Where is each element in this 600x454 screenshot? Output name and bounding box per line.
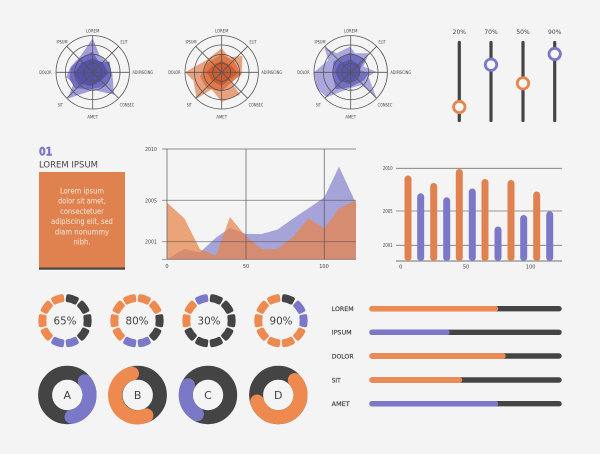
donut A [45,373,90,417]
radar labels: AMET [345,114,356,120]
radar labels [168,28,283,120]
card text: adipiscing elit, sed [51,217,113,226]
radar labels: CONSEC [120,102,134,108]
radar labels: IPSUM [56,40,68,46]
radar labels: SIT [187,102,192,108]
radar labels: CONSEC [378,102,392,108]
donut B: B [134,389,141,402]
radar chart: large purple one [297,28,412,120]
area chart axis labels: 2010 [145,147,157,153]
radar labels: ADIPISCING [261,70,283,76]
orange area [167,200,356,259]
radar labels: DOLOR [39,70,52,76]
area chart axis labels [145,147,329,270]
text panel [39,145,125,270]
radar data polygons [185,48,242,102]
card text: diam nonummy [55,227,110,236]
area chart axis labels: 0 [165,264,169,270]
radar labels: AMET [216,114,227,120]
bar chart axis labels: 2001 [383,243,393,249]
segmented donut 65%: 65% [54,316,77,328]
segmented donut 30%: 30% [198,316,221,328]
area chart axis labels: 2005 [145,198,157,204]
radar labels: LOREM [86,28,100,34]
slider 20%: 20% [453,29,466,36]
area chart axis labels: 100 [319,264,329,270]
bar: amet: AMET [332,400,350,408]
area chart axis labels: 2001 [145,240,157,246]
bar: ipsum: IPSUM [332,329,352,337]
slider 70%: 70% [484,29,498,36]
bar chart axis labels: 50 [463,264,469,270]
card text: consectetuer [60,207,105,216]
bar chart axis labels: 0 [399,264,402,270]
area chart axis labels: 50 [243,264,249,270]
radar labels: ADIPISCING [390,70,412,76]
bars [408,172,550,258]
orange card [39,172,125,270]
donut C: C [204,389,212,402]
area chart [145,147,356,270]
bar chart [383,166,562,270]
donut A: A [64,389,72,402]
segmented donut 80%: 80% [126,316,149,328]
panel heading: LOREM IPSUM [39,161,98,171]
slider 90%: 90% [548,29,562,36]
radar data polygons [66,38,114,99]
card text [51,186,113,246]
radar labels: DOLOR [297,70,310,76]
radar chart: purple one [39,28,154,120]
radar chart: orange one [168,28,283,120]
radar labels: CONSEC [249,102,263,108]
bar chart axis labels: 2005 [383,209,393,215]
donut D [256,373,301,417]
segmented donut 65% [40,296,90,346]
number heading: 01 [39,145,52,159]
purple area [167,167,356,259]
bar: sit: SIT [332,376,341,384]
card text: Lorem ipsum [60,186,104,195]
donut B [115,373,160,417]
radar labels: AMET [87,114,98,120]
progress bars [332,305,559,408]
radar labels: DOLOR [168,70,181,76]
radar labels [39,28,154,120]
card text: nibh. [74,237,90,246]
radar labels: ELIT [379,40,386,46]
radar labels: ADIPISCING [132,70,154,76]
bar chart axis labels: 2010 [383,166,393,172]
radar labels: IPSUM [315,40,326,46]
donut D: D [274,389,283,402]
segmented donut 90% [256,296,306,346]
bar chart axis labels [383,166,535,270]
bar: dolor: DOLOR [332,352,354,360]
radar labels: LOREM [344,28,358,34]
card text: dolor sit amet, [58,197,106,206]
radar labels: SIT [316,102,321,108]
radar labels: ELIT [249,40,257,46]
radar labels [297,28,412,120]
radar labels: IPSUM [185,40,197,46]
segmented donut 30% [184,296,234,346]
radar data polygons [314,47,377,98]
donut C [186,373,230,417]
segmented donut 90%: 90% [270,316,293,328]
card base line [39,268,125,270]
radar labels: ELIT [120,40,128,46]
radar labels: LOREM [215,28,229,34]
slider 50%: 50% [516,29,530,36]
bar: lorem: LOREM [332,305,354,313]
bar chart axis labels: 100 [526,264,535,270]
segmented donut 80% [112,296,162,346]
vertical sliders [453,29,562,121]
radar labels: SIT [58,102,63,108]
